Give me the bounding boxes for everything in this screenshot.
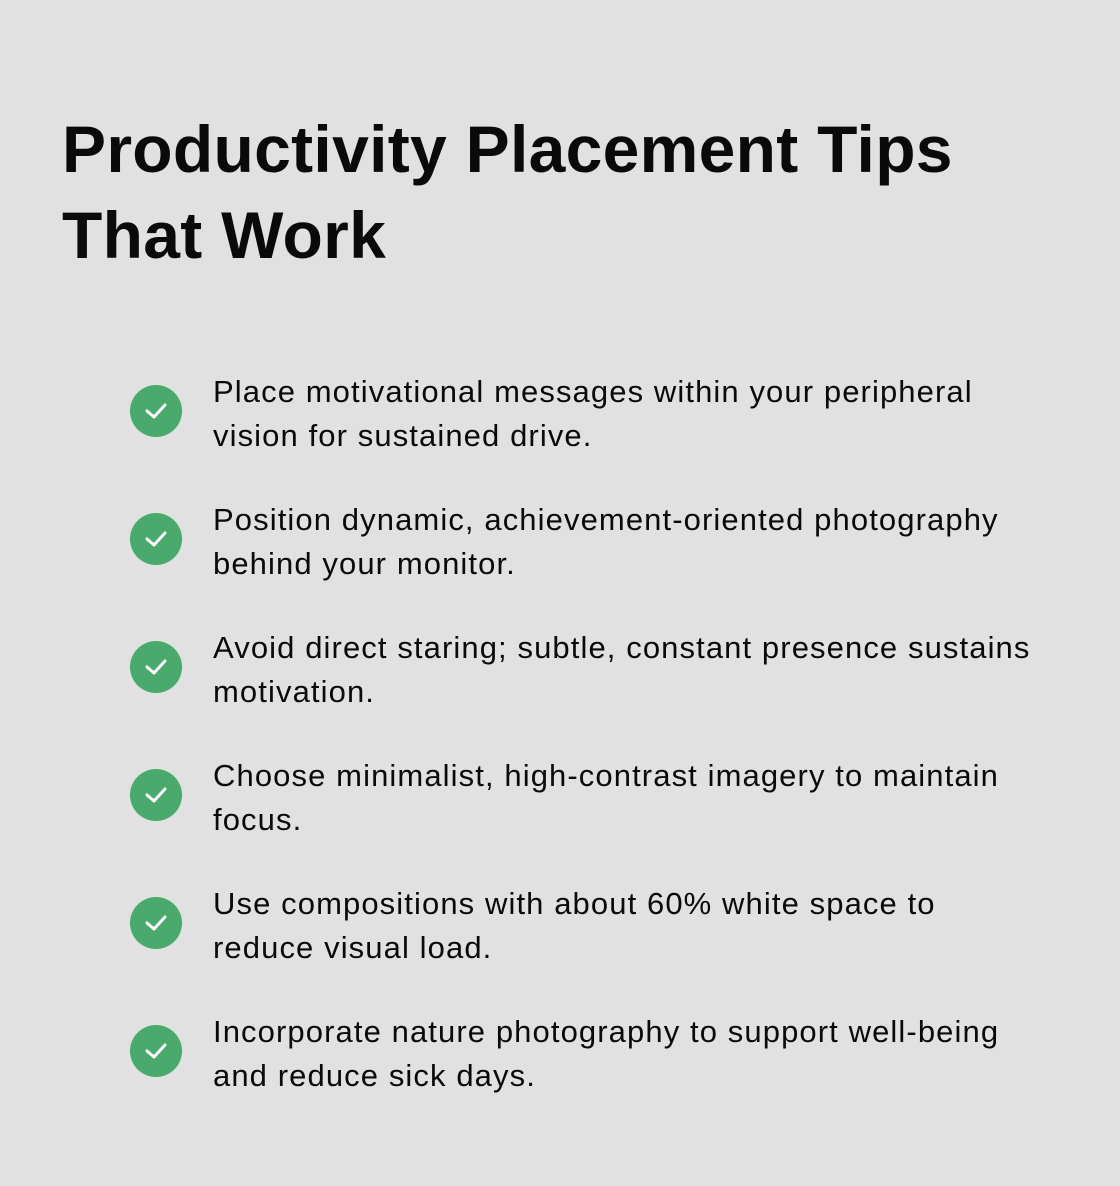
text: focus.: [213, 802, 302, 837]
tip 6: [130, 1014, 999, 1093]
text: [213, 886, 936, 965]
icon: check: [130, 513, 182, 565]
tip 2: [130, 502, 999, 581]
text: vision for sustained drive.: [213, 418, 592, 453]
text: Place motivational messages within your peripheral: [213, 374, 973, 409]
title: That Work: [62, 198, 386, 272]
icon: check: [130, 769, 182, 821]
tip 3: [130, 630, 1030, 709]
text: and reduce sick days.: [213, 1058, 536, 1093]
text: Position dynamic, achievement-oriented photography: [213, 502, 999, 537]
title: Productivity Placement Tips: [62, 112, 953, 186]
tip 1: [130, 374, 973, 453]
title: [62, 112, 953, 272]
text: motivation.: [213, 674, 375, 709]
icon: check: [130, 385, 182, 437]
text: Incorporate nature photography to support well-being: [213, 1014, 999, 1049]
tip 5: [130, 886, 936, 965]
text: Choose minimalist, high-contrast imagery to maintain: [213, 758, 999, 793]
text: [213, 374, 973, 453]
text: Use compositions with about 60% white space to: [213, 886, 936, 921]
text: [213, 758, 999, 837]
text: [213, 502, 999, 581]
text: behind your monitor.: [213, 546, 516, 581]
text: reduce visual load.: [213, 930, 492, 965]
text: [213, 630, 1030, 709]
text: [213, 1014, 999, 1093]
icon: check: [130, 1025, 182, 1077]
icon: check: [130, 897, 182, 949]
tip 4: [130, 758, 999, 837]
icon: check: [130, 641, 182, 693]
text: Avoid direct staring; subtle, constant presence sustains: [213, 630, 1030, 665]
